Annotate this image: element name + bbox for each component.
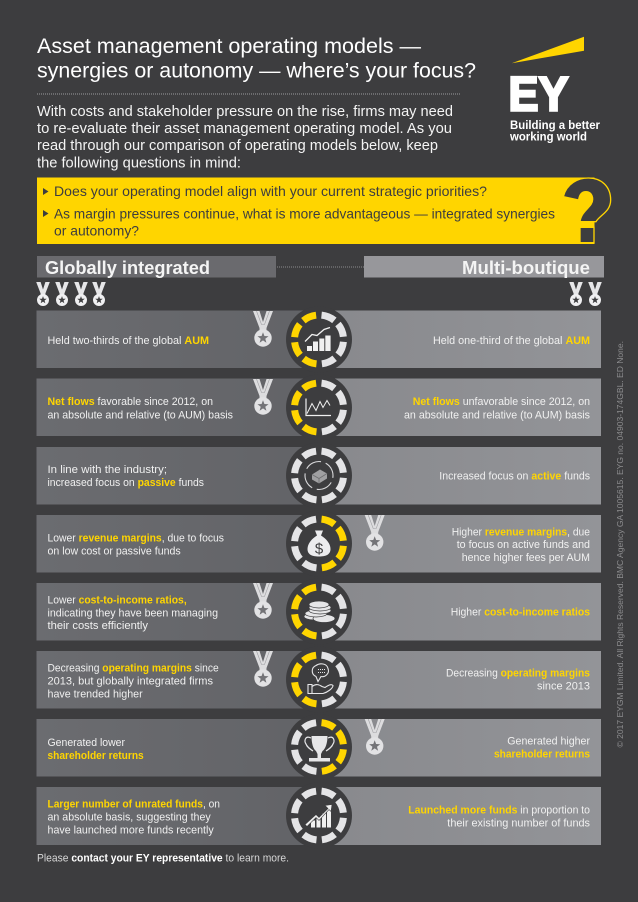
right text: their existing number of funds	[447, 818, 591, 830]
left text	[48, 533, 225, 557]
row 1: AUM	[36, 306, 601, 372]
left text: Held two-thirds of the global AUM	[48, 335, 209, 347]
icon: chip with line chart	[286, 374, 352, 440]
right text: hence higher fees per AUM	[462, 552, 590, 564]
right text: Decreasing operating margins	[446, 668, 590, 680]
right text: Higher cost-to-income ratios	[451, 607, 590, 619]
medal tally: Globally integrated	[36, 282, 106, 306]
icon: question mark	[563, 178, 611, 243]
left text	[48, 663, 219, 700]
intro paragraph	[37, 103, 453, 172]
medal	[253, 651, 273, 687]
left text: indicating they have been managing	[48, 607, 218, 619]
bullet question 2	[43, 206, 555, 238]
logo wordmark: EY	[508, 68, 568, 122]
row 8: funds launched	[36, 782, 601, 848]
right text	[408, 805, 591, 830]
medal	[253, 583, 273, 619]
left text: their costs efficiently	[48, 620, 149, 632]
logo beam	[512, 37, 584, 63]
left text: an absolute basis, suggesting they	[48, 812, 211, 824]
right text: to focus on active funds and	[457, 539, 590, 551]
header: Multi-boutique	[364, 256, 604, 278]
row 3: passive vs active	[36, 442, 601, 508]
right text	[494, 736, 590, 761]
left text: Lower revenue margins, due to focus	[48, 533, 225, 545]
header: Multi-boutique: Multi-boutique	[462, 257, 590, 278]
left text: increased focus on passive funds	[48, 477, 205, 489]
row 5: cost-to-income ratios	[36, 578, 601, 644]
title: synergies or autonomy — where’s your focus?	[37, 60, 476, 82]
left text: In line with the industry;	[48, 464, 167, 476]
right text	[446, 668, 590, 693]
medal tally: Multi-boutique	[569, 282, 602, 306]
right text: Increased focus on active funds	[439, 470, 591, 482]
medal	[365, 515, 385, 551]
medal	[253, 311, 273, 347]
left text: shareholder returns	[48, 750, 144, 762]
left text: Lower cost-to-income ratios,	[48, 594, 187, 606]
right text: Net flows unfavorable since 2012, on	[413, 396, 590, 408]
left text	[48, 737, 144, 762]
right text	[452, 526, 590, 564]
row 2: net flows	[36, 374, 601, 440]
logo tagline	[509, 118, 600, 144]
right text: Launched more funds in proportion to	[408, 805, 590, 817]
icon: chip with trophy	[286, 714, 352, 780]
left text: have launched more funds recently	[48, 824, 214, 836]
icon: chip with hand and speech bubble	[286, 646, 352, 712]
right text	[404, 396, 591, 421]
left text	[48, 396, 234, 421]
left text	[48, 594, 218, 632]
icon: chip with coins	[286, 578, 352, 644]
right text: since 2013	[537, 681, 590, 693]
right text: Generated higher	[507, 736, 590, 748]
intro paragraph: read through our comparison of operating models below, keep	[37, 137, 438, 154]
left text: 2013, but globally integrated firms	[48, 676, 214, 688]
icon: chip with money bag: $	[315, 540, 324, 558]
right text: an absolute and relative (to AUM) basis	[404, 409, 591, 421]
left text	[48, 799, 220, 836]
intro paragraph: the following questions in mind:	[37, 154, 241, 172]
title	[37, 35, 476, 82]
left text: Net flows favorable since 2012, on	[48, 396, 213, 408]
left text: have trended higher	[48, 688, 143, 700]
footer note: Please contact your EY representative to learn more.	[37, 853, 289, 865]
EY logo	[508, 37, 600, 144]
right text: shareholder returns	[494, 749, 590, 761]
bullet question 1: Does your operating model align with your current strategic priorities?	[54, 183, 487, 199]
row 6: operating margins	[36, 646, 601, 712]
right text: Held one-third of the global AUM	[433, 335, 590, 347]
intro paragraph: to re-evaluate their asset management operating model. As you	[37, 120, 452, 137]
panel: key questions	[37, 178, 611, 244]
header: Globally integrated	[37, 256, 276, 278]
bullet question 2: or autonomy?	[54, 222, 139, 238]
row 7: shareholder returns	[36, 714, 601, 780]
logo tagline: working world	[509, 130, 587, 144]
icon: chip with money cycle	[286, 442, 352, 508]
header: Globally integrated: Globally integrated	[45, 257, 210, 278]
left text: Larger number of unrated funds, on	[48, 799, 220, 811]
medal	[365, 719, 385, 755]
row 4: revenue margins	[36, 510, 601, 576]
title: Asset management operating models —	[37, 35, 421, 58]
copyright vertical text: © 2017 EYGM Limited. All Rights Reserved. BMC Agency GA 1005615. EYG no. 04903-174GBL. ED None.	[615, 341, 625, 748]
intro paragraph: With costs and stakeholder pressure on the rise, firms may need	[37, 103, 453, 120]
left text: on low cost or passive funds	[48, 545, 181, 557]
left text	[48, 464, 205, 489]
left text: an absolute and relative (to AUM) basis	[48, 409, 234, 421]
icon: chip with rising bars and arrow	[286, 782, 352, 848]
icon: chip with bar chart	[286, 306, 352, 372]
left text: Generated lower	[48, 737, 125, 749]
bullet question 2: As margin pressures continue, what is more advantageous — integrated synergies	[54, 206, 555, 222]
logo tagline: Building a better	[510, 118, 600, 132]
icon: chip with money bag	[286, 510, 352, 576]
medal	[253, 379, 273, 415]
right text: Higher revenue margins, due	[452, 526, 590, 538]
left text: Decreasing operating margins since	[48, 663, 219, 675]
